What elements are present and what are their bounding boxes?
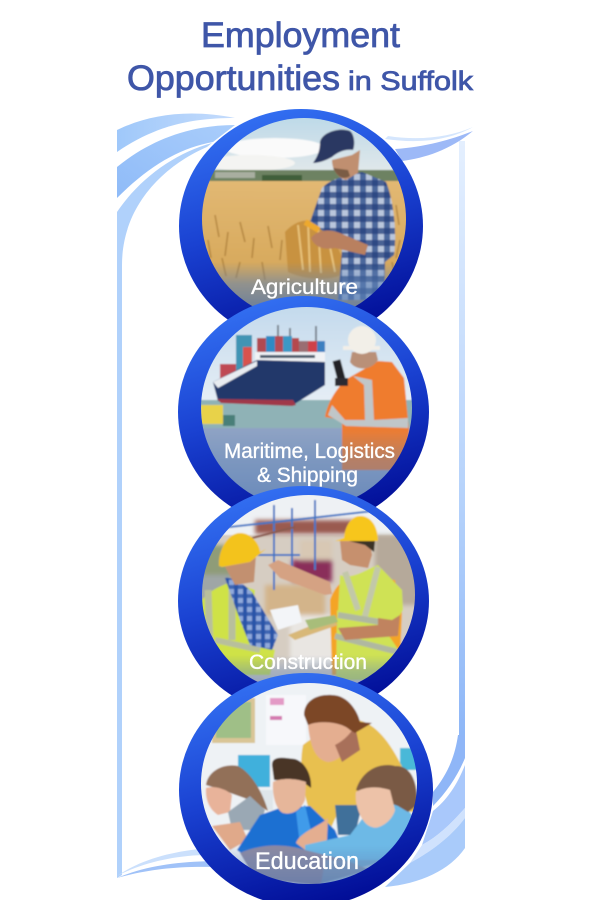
photo: cargo ship and port worker [201, 307, 412, 497]
panel: agriculture [179, 109, 423, 320]
background frame swooshes [117, 114, 473, 887]
ring: maritime [178, 296, 429, 528]
panel: education [179, 673, 433, 900]
label: Construction: Construction [249, 651, 367, 674]
label: Education: Education [255, 848, 359, 875]
title [127, 16, 474, 98]
title: Employment [201, 16, 400, 55]
label: Maritime, Logistics & Shipping [224, 440, 395, 487]
label: Agriculture: Agriculture [251, 276, 358, 299]
ring: agriculture [179, 109, 423, 343]
title: Opportunities [127, 59, 340, 98]
title: in Suffolk [348, 66, 474, 96]
photo: farmer in wheat field [202, 118, 406, 306]
ring: education [179, 673, 433, 900]
photo: construction workers [202, 495, 415, 683]
label: Maritime, Logistics & Shipping: & Shipping [257, 464, 358, 487]
panel: maritime [178, 296, 429, 528]
ring: construction [178, 486, 429, 716]
label: Maritime, Logistics & Shipping: Maritime, Logistics [224, 440, 395, 463]
photo: teacher with children [198, 680, 422, 890]
panel: construction [178, 486, 429, 716]
